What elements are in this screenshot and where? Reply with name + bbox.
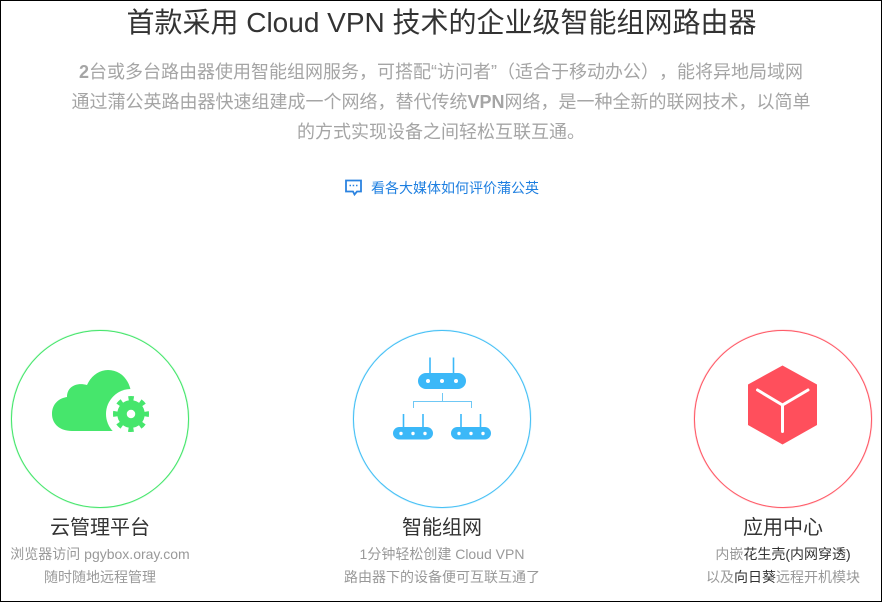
intro paragraph <box>71 62 810 142</box>
panel: application center <box>694 329 872 585</box>
description: 路由器下的设备便可互联互通了 <box>344 569 540 585</box>
link text: 看各大媒体如何评价蒲公英 <box>371 180 539 196</box>
icon: routers <box>393 358 491 440</box>
red circle <box>694 330 872 508</box>
description: 浏览器访问 pgybox.oray.com <box>10 546 190 562</box>
green circle <box>11 330 189 508</box>
intro paragraph: 通过蒲公英路由器快速组建成一个网络，替代传统VPN网络，是一种全新的联网技术，以简单 <box>71 92 810 112</box>
panel: cloud platform <box>10 329 190 585</box>
heading: 云管理平台 <box>50 517 150 539</box>
heading: 智能组网 <box>402 517 482 539</box>
description <box>706 546 860 585</box>
description <box>10 546 190 585</box>
title: 首款采用 Cloud VPN 技术的企业级智能组网路由器 <box>126 7 757 38</box>
icon: cube <box>748 366 817 444</box>
intro paragraph: 的方式实现设备之间轻松互联互通。 <box>297 122 585 142</box>
description: 1分钟轻松创建 Cloud VPN <box>360 546 524 562</box>
icon: cloud with gear <box>52 370 149 432</box>
description: 内嵌花生壳(内网穿透) <box>715 546 851 562</box>
icon: chat bubble <box>345 180 362 196</box>
description: 以及向日葵远程开机模块 <box>706 569 860 585</box>
blue circle <box>353 330 531 508</box>
panel: smart network <box>344 329 540 585</box>
media link <box>345 180 539 196</box>
intro paragraph: 2台或多台路由器使用智能组网服务，可搭配“访问者”（适合于移动办公），能将异地局域网 <box>79 62 803 82</box>
heading: 应用中心 <box>743 517 823 539</box>
description: 随时随地远程管理 <box>44 569 156 585</box>
description <box>344 546 540 585</box>
